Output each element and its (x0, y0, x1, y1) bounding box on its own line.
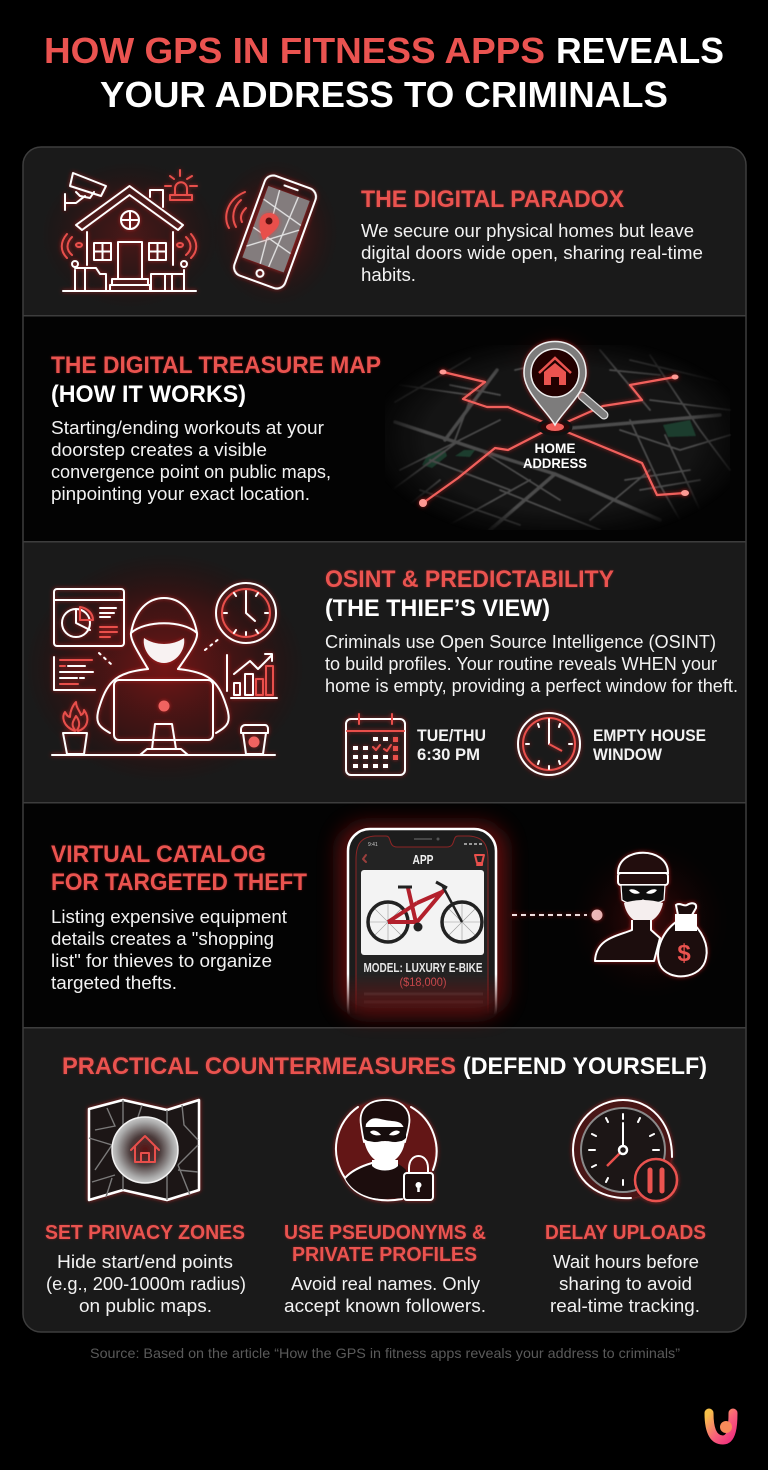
panel: virtual catalog (51, 825, 728, 1029)
title: YOUR ADDRESS TO CRIMINALS (100, 74, 668, 115)
text (45, 1222, 246, 1316)
title: REVEALS (556, 30, 724, 71)
icon: logo (709, 1413, 733, 1440)
icon: clock (518, 713, 580, 775)
icon: map with privacy zone (89, 1100, 199, 1200)
icon: clock with pause (573, 1100, 677, 1201)
label: schedule: TUE/THU (417, 727, 486, 745)
heading (62, 1053, 707, 1080)
text block (361, 221, 703, 285)
text block: habits. (361, 265, 416, 285)
product text: MODEL: LUXURY E-BIKE (364, 961, 482, 975)
text block (51, 418, 331, 504)
heading: OSINT & PREDICTABILITY (325, 566, 614, 593)
text: Avoid real names. Only (291, 1274, 480, 1294)
panel: digital treasure map (51, 325, 735, 530)
heading: PRACTICAL COUNTERMEASURES (62, 1053, 456, 1080)
icon: hooded hacker scene (25, 553, 305, 783)
heading: (THE THIEF’S VIEW) (325, 595, 550, 622)
text block: Listing expensive equipment (51, 907, 287, 927)
column: pseudonyms (284, 1100, 486, 1316)
text (284, 1222, 486, 1316)
street grid (385, 345, 735, 530)
label: ADDRESS (523, 455, 587, 471)
glowing routes (423, 372, 685, 503)
text block: pinpointing your exact location. (51, 484, 310, 504)
heading: THE DIGITAL TREASURE MAP (51, 352, 381, 379)
heading (51, 841, 307, 896)
panel: digital paradox (40, 159, 703, 309)
phone halo (340, 825, 505, 1015)
text block (325, 632, 738, 696)
title (44, 30, 724, 115)
map illustration (385, 325, 735, 530)
icon: home pin (524, 342, 586, 425)
text: SET PRIVACY ZONES (45, 1222, 245, 1244)
connector arrow (512, 910, 602, 920)
text: on public maps. (79, 1296, 212, 1316)
text block (51, 907, 287, 993)
icon: masked profile with lock (335, 1100, 437, 1200)
text block: digital doors wide open, sharing real-time (361, 243, 703, 263)
text: real-time tracking. (550, 1296, 700, 1316)
label: HOME (534, 440, 576, 456)
heading: (DEFEND YOURSELF) (463, 1053, 707, 1080)
text block: convergence point on public maps, (51, 462, 331, 482)
panel: countermeasures (45, 1053, 707, 1316)
text: sharing to avoid (559, 1274, 692, 1294)
text block: list" for thieves to organize (51, 951, 272, 971)
text: (e.g., 200-1000m radius) (46, 1274, 246, 1294)
product image: bike (361, 870, 484, 955)
target point (539, 420, 571, 434)
product text (364, 961, 482, 989)
column: privacy zones (45, 1100, 246, 1316)
product text: ($18,000) (400, 975, 446, 989)
text block: doorstep creates a visible (51, 440, 267, 460)
text: USE PSEUDONYMS & (284, 1222, 486, 1244)
text: DELAY UPLOADS (545, 1222, 706, 1244)
text block: Starting/ending workouts at your (51, 418, 324, 438)
label: empty house window: WINDOW (593, 746, 662, 764)
panel: OSINT (25, 553, 738, 783)
text: accept known followers. (284, 1296, 486, 1316)
label (523, 440, 587, 471)
heading: FOR TARGETED THEFT (51, 869, 307, 896)
text block: home is empty, providing a perfect window for theft. (325, 676, 738, 696)
heading: (HOW IT WORKS) (51, 381, 246, 408)
text (545, 1222, 706, 1316)
label: schedule: 6:30 PM (417, 746, 480, 764)
icon: calendar (346, 714, 405, 775)
heading: VIRTUAL CATALOG (51, 841, 266, 868)
column: delay uploads (545, 1100, 706, 1316)
title: HOW GPS IN FITNESS APPS (44, 30, 545, 71)
icon: thief with money bag (572, 842, 728, 998)
text block: targeted thefts. (51, 973, 177, 993)
phone with product listing (348, 829, 496, 1029)
heading (325, 566, 614, 622)
text block: Criminals use Open Source Intelligence (OSINT) (325, 632, 716, 652)
text: Wait hours before (553, 1252, 699, 1272)
heading: THE DIGITAL PARADOX (361, 186, 624, 213)
text block: We secure our physical homes but leave (361, 221, 694, 241)
label: schedule (417, 727, 486, 764)
heading (51, 352, 381, 408)
text: Hide start/end points (57, 1252, 233, 1272)
source note: Source: Based on the article “How the GPS in fitness apps reveals your address to criminals” (90, 1345, 680, 1361)
magnifying handle (582, 396, 604, 415)
icon: house with camera and alarm (40, 161, 220, 309)
text block: details creates a "shopping (51, 929, 274, 949)
text: PRIVATE PROFILES (292, 1244, 477, 1266)
label: empty house window (593, 727, 706, 764)
main panel (23, 147, 746, 1332)
icon: thief with money bag: $ (677, 940, 691, 967)
text block: to build profiles. Your routine reveals WHEN your (325, 654, 717, 674)
icon: phone with map pin (211, 159, 339, 307)
phone with product listing: 9:41 (368, 842, 378, 848)
app label: APP (412, 852, 434, 867)
label: empty house window: EMPTY HOUSE (593, 727, 706, 745)
